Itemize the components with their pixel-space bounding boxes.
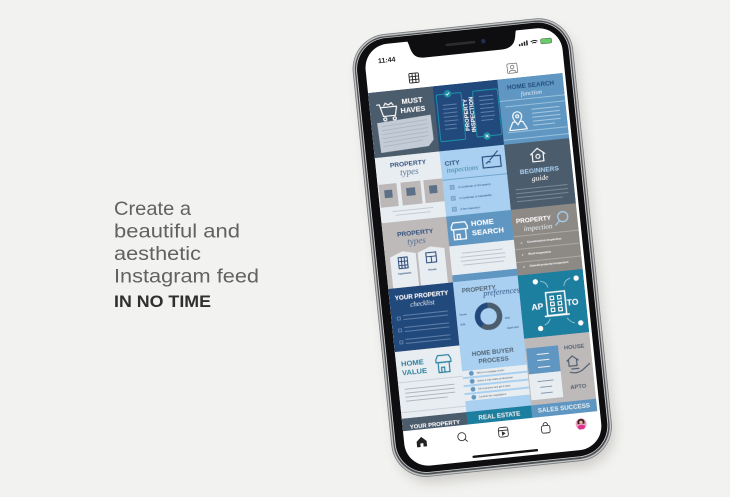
heading: PROPERTY	[516, 215, 552, 225]
phone screen	[363, 26, 604, 468]
right card	[472, 89, 502, 137]
icon: storefront	[451, 222, 468, 240]
checklist	[450, 185, 457, 211]
post: home value: VALUE	[401, 366, 427, 377]
post: city inspections: A Certificate of Occupancy	[458, 182, 492, 189]
heading: BEGINNERS	[520, 165, 560, 176]
icon: shopping cart	[376, 102, 398, 122]
post: home buyer process: Select a real estate professional	[477, 376, 513, 383]
home indicator	[472, 449, 538, 458]
heading: PROPERTY	[390, 159, 427, 170]
phone shadow	[355, 24, 617, 486]
post: your property partial: YOUR PROPERTY	[410, 420, 460, 431]
post: property types two cards: types	[407, 235, 427, 247]
post: city inspections: inspections	[446, 163, 479, 175]
icon: storefront	[435, 354, 452, 373]
post: home value	[395, 345, 466, 419]
post: city inspections: A fire inspection	[460, 205, 481, 211]
tab: tagged icon	[507, 63, 518, 74]
post: house apto	[524, 332, 596, 405]
post: home buyer process: Talk to a mortgage lender	[476, 369, 505, 375]
post: home search: SEARCH	[471, 225, 504, 238]
checklist: ✓	[523, 265, 526, 269]
checklist	[397, 311, 451, 344]
icon: house in hand	[566, 354, 591, 374]
card: apartment: Apartment	[398, 270, 412, 276]
status: time: 11:44	[378, 57, 396, 65]
icon: house	[530, 148, 546, 162]
left card	[436, 92, 466, 142]
post: sales success partial	[531, 399, 598, 419]
post: property inspection checklist: inspection	[523, 222, 553, 233]
post: property inspection	[433, 80, 504, 151]
icon: shop bag	[541, 422, 550, 433]
icon: signed cheque	[482, 150, 501, 168]
post: property types three boxes: types	[400, 166, 420, 178]
post: city inspections	[439, 145, 511, 217]
heading: must haves: MUST	[401, 95, 423, 106]
heading: CITY	[444, 159, 461, 168]
post: beginners guide	[504, 138, 576, 210]
checklist: Roof inspection	[528, 250, 551, 256]
pale panel	[449, 240, 517, 275]
post: must haves	[368, 86, 439, 158]
heading: HOME SEARCH	[507, 80, 555, 92]
post: your property checklist: checklist	[410, 298, 436, 309]
card: house: House	[428, 267, 437, 272]
post: property inspection checklist	[511, 203, 583, 276]
headline text block: beautiful and	[114, 220, 240, 242]
vertical heading	[462, 96, 476, 132]
post: your property partial	[402, 412, 468, 433]
post: apto	[518, 269, 589, 339]
type boxes	[379, 178, 445, 208]
post: property preferences	[453, 276, 525, 345]
note card	[377, 115, 434, 153]
post: city inspections: A Certificate of Habitability	[459, 193, 493, 200]
donut chart	[477, 304, 501, 328]
post: house apto: APTO	[570, 384, 587, 391]
vertical heading: PROPERTY	[463, 99, 472, 131]
post: real estate partial	[466, 405, 532, 426]
icon: map pin	[508, 111, 528, 131]
notch	[407, 29, 518, 59]
icon: home	[416, 436, 427, 447]
post: property preferences: 60%	[505, 316, 511, 320]
icon: magnifier	[554, 211, 569, 225]
icon: search	[457, 432, 468, 443]
post: home search	[446, 210, 518, 282]
post grid	[368, 73, 598, 433]
tab: grid icon	[409, 73, 419, 83]
post: property types three boxes	[375, 151, 446, 223]
post: home buyer process: Tell a pictures and get it done	[478, 384, 511, 391]
heading: PROPERTY	[397, 228, 434, 239]
heading: YOUR PROPERTY	[395, 290, 450, 302]
post: beginners guide: guide	[531, 172, 550, 183]
phone mockup	[349, 15, 617, 486]
post: your property checklist	[388, 282, 459, 352]
post: home buyer process: PROCESS	[478, 355, 509, 366]
post: home search map: function	[520, 89, 542, 98]
check badge	[443, 90, 452, 98]
phone frame	[349, 15, 615, 480]
heading: PROPERTY	[462, 284, 497, 295]
heading: HOME	[401, 357, 424, 369]
heading: HOUSE	[564, 344, 585, 352]
checklist: Overall property inspection	[529, 260, 569, 268]
icon: reels	[498, 427, 509, 437]
headline text block	[114, 198, 259, 311]
bottom navigation	[416, 418, 589, 464]
icon: profile avatar	[575, 418, 587, 430]
post: apto: TO	[566, 296, 579, 308]
heading: HOME BUYER	[472, 347, 515, 358]
post: sales success partial: SALES SUCCESS	[538, 402, 590, 415]
checklist: Construction inspection	[527, 236, 562, 244]
post: property types two cards	[381, 217, 453, 289]
heading: HOME	[471, 217, 494, 228]
vertical heading: INSPECTION	[468, 96, 478, 132]
checklist	[520, 236, 569, 269]
post: home buyer process	[459, 339, 531, 412]
headline text block: IN NO TIME	[114, 292, 211, 311]
headline text block: Instagram feed	[114, 266, 259, 288]
headline text block: Create a	[114, 198, 191, 220]
post: home buyer process: Conduct the negotiations	[479, 393, 507, 399]
post: property preferences: preferences	[482, 285, 520, 298]
cross badge	[483, 132, 491, 140]
headline text block: aesthetic	[114, 243, 201, 265]
post: real estate partial: REAL ESTATE	[478, 411, 521, 422]
post: home search map	[497, 73, 569, 145]
post: must haves: HAVES	[400, 104, 426, 115]
left column	[526, 345, 561, 374]
checklist: ✓	[520, 241, 523, 245]
checklist: ✓	[521, 253, 525, 257]
post: property preferences: House	[459, 312, 468, 317]
process steps	[462, 365, 530, 401]
post: property preferences: 40%	[460, 322, 466, 327]
post: property preferences: Apartment	[507, 325, 519, 330]
icon: building	[542, 291, 570, 316]
heading: AP	[531, 301, 544, 312]
status: signal, wifi, battery	[518, 38, 552, 46]
